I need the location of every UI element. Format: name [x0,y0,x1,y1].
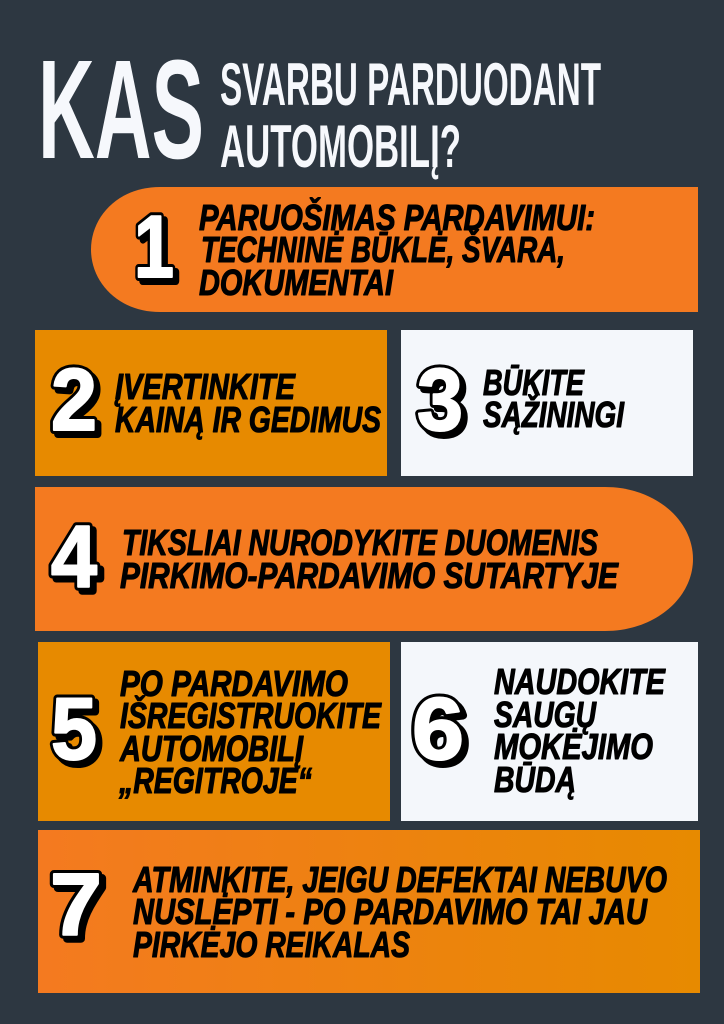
number 1: 1 [134,197,174,296]
step 4 text: PIRKIMO-PARDAVIMO SUTARTYJE [120,555,619,596]
number 6: 6 [412,679,464,778]
step 1 text: PARUOŠIMAS PARDAVIMUI: [199,196,595,238]
number 1: 1 [134,197,174,296]
number 4: 4 [55,511,101,610]
step 3 text: SĄŽININGI [483,393,625,435]
step 7 text: PIRKĖJO REIKALAS [133,924,410,965]
number 1: 1 [138,201,178,300]
number 2: 2 [51,350,97,449]
step 6 text [494,661,666,800]
number 2: 2 [55,354,101,453]
step 6 text: NAUDOKITE [494,661,666,702]
step 2 text [114,366,381,440]
title word: KAS: KAS [38,30,204,188]
title line 2: AUTOMOBILĮ? [220,113,461,180]
panel: step 3 [401,330,693,476]
step 4 text [120,522,619,596]
panel background 5 [38,642,390,821]
panel background 4 [35,487,693,631]
panel: step 1 [91,187,698,312]
panel: step 4 [35,487,693,631]
number 7: 7 [50,855,102,954]
panel: step 6 [401,642,698,821]
step 4 text: TIKSLIAI NURODYKITE DUOMENIS [122,522,598,563]
step 5 text: AUTOMOBILĮ [119,728,304,769]
number 4: 4 [51,507,97,606]
panel: step 7 [38,830,700,993]
number 2: 2 [51,350,97,449]
step 2 text: KAINĄ IR GEDIMUS [115,399,381,440]
step 2 text: ĮVERTINKITE [114,366,296,407]
number 5: 5 [51,679,97,778]
step 5 text: IŠREGISTRUOKITE [120,694,382,736]
number 3: 3 [421,354,467,453]
panel: step 5 [38,642,390,821]
panel background 7 [38,830,700,993]
step 6 text: MOKĖJIMO [494,726,653,767]
panel: step 2 [35,330,387,476]
step 3 text: BŪKITE [483,362,585,403]
title [38,30,601,188]
number 6: 6 [412,679,464,778]
step 5 text: „REGITROJE“ [118,760,312,801]
number 5: 5 [51,679,97,778]
step 5 text: PO PARDAVIMO [120,663,348,704]
panel background 3 [401,330,693,476]
step 3 text [483,362,625,435]
step 1 text: DOKUMENTAI [199,262,394,303]
number 5: 5 [55,683,101,782]
step 6 text: BŪDĄ [494,759,576,800]
panel background 6 [401,642,698,821]
step 6 text: SAUGŲ [494,694,597,735]
number 7: 7 [50,855,102,954]
step 1 text [199,196,595,303]
step 5 text [118,663,382,801]
number 4: 4 [51,507,97,606]
panel background 2 [35,330,387,476]
number 6: 6 [416,683,468,782]
number 3: 3 [417,350,463,449]
number 3: 3 [417,350,463,449]
number 7: 7 [54,859,106,958]
panel background 1 [91,187,698,312]
step 1 text: TECHNINĖ BŪKLĖ, ŠVARA, [201,228,565,270]
step 7 text [132,859,667,965]
